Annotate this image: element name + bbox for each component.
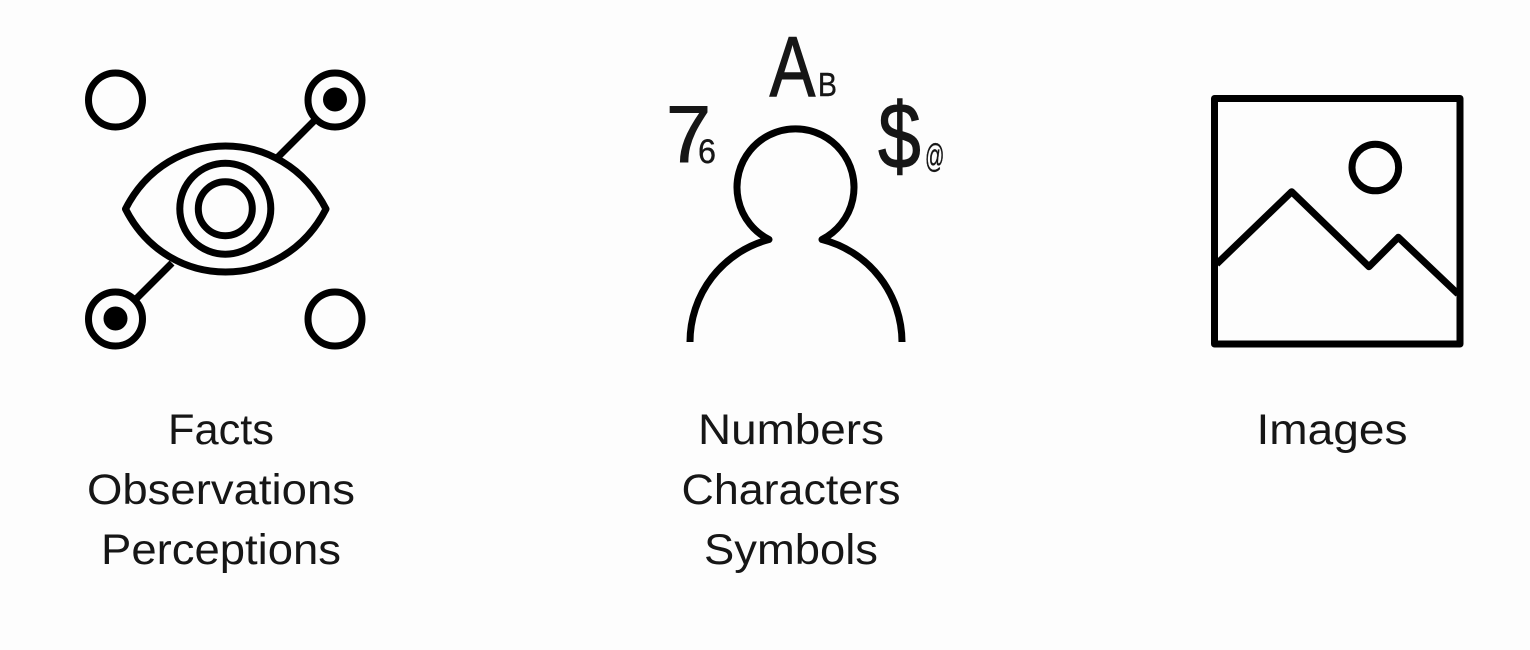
text: images label: Images — [1256, 406, 1408, 454]
icon: person with characters: A — [770, 20, 816, 115]
icon: image placeholder — [1214, 98, 1460, 344]
icon: person with characters: $ — [878, 84, 921, 189]
text: facts list: Perceptions — [101, 526, 341, 574]
icon: eye with connected nodes — [88, 73, 362, 346]
text: numbers list: Numbers — [698, 406, 884, 454]
icon: person with characters: @ — [925, 138, 944, 174]
text: facts list: Facts — [168, 406, 274, 454]
icon: person with characters: 7 — [666, 90, 711, 180]
text: numbers list: Symbols — [704, 526, 878, 574]
icon: person with characters: B — [818, 66, 837, 104]
icon: person with characters — [666, 20, 944, 342]
text: numbers list: Characters — [682, 466, 900, 514]
text: facts list: Observations — [87, 466, 355, 514]
text: numbers list — [682, 406, 900, 574]
icon: person with characters: 6 — [698, 133, 716, 171]
text: facts list — [87, 406, 355, 574]
